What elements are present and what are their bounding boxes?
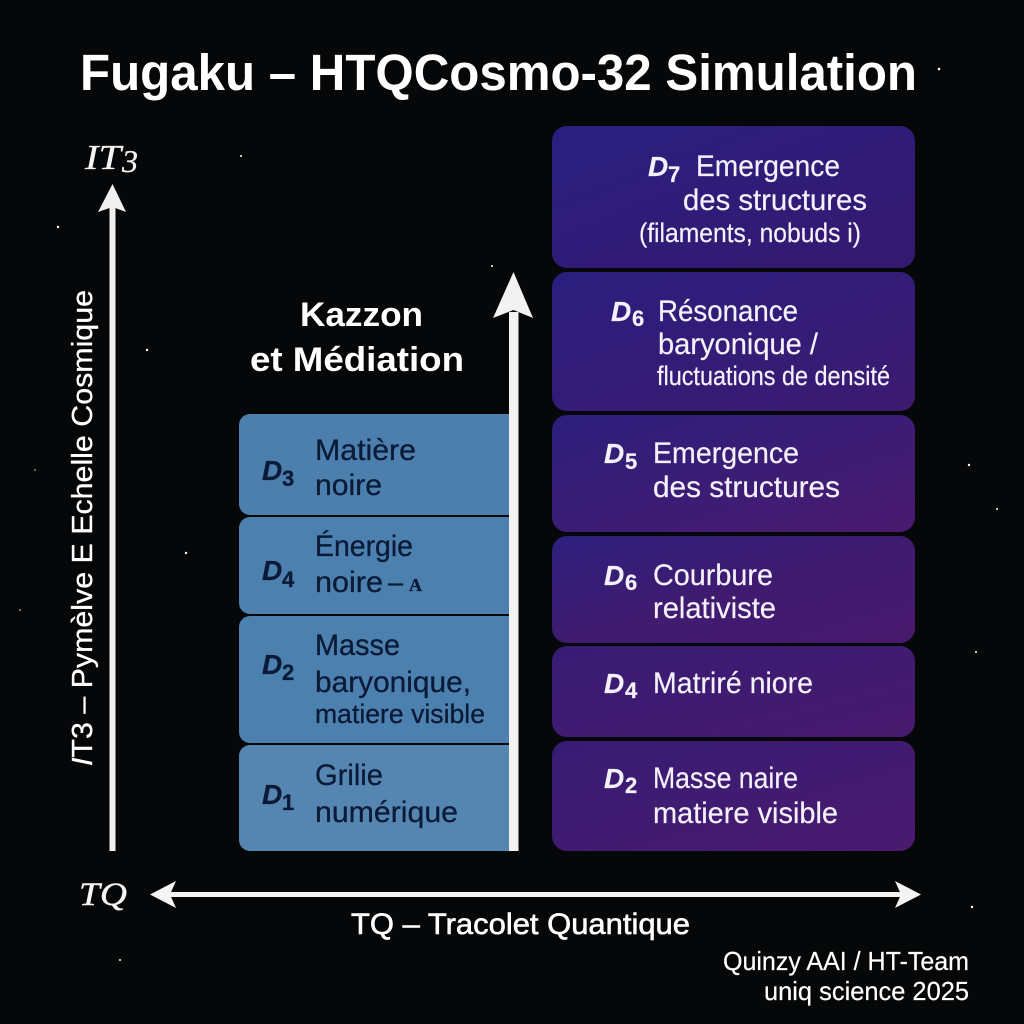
panel: right purple stack [552, 126, 915, 851]
x-axis label: TQ – Tracolet Quantique [351, 908, 690, 941]
layer D4 Énergie noire: Énergie [315, 530, 413, 563]
layer D2 Masse naire [552, 741, 915, 851]
credits: Quinzy AAI / HT-Team [723, 946, 969, 976]
layer D5 Emergence des structures: D [604, 438, 624, 469]
layer D6 Résonance baryonique: fluctuations de densité [657, 361, 890, 391]
y-axis label: IT3 – Pymèlve E Echelle Cosmique [67, 290, 99, 766]
layer D3 Matière noire: Matière [315, 434, 416, 467]
layer D7 Emergence des structures: Emergence [696, 150, 840, 183]
layer D3 Matière noire: 3 [282, 466, 294, 491]
layer D2 Masse naire: Masse naire [653, 762, 798, 795]
layer D3 Matière noire: noire [315, 469, 382, 502]
layer D2 Masse baryonique: matiere visible [315, 699, 485, 729]
layer D1 Grilie numérique: D [262, 779, 282, 810]
layer D6 Résonance baryonique: baryonique / [658, 328, 819, 361]
x-axis arrow [150, 881, 921, 908]
layer D4 Énergie noire: A [409, 575, 422, 595]
layer D1 Grilie numérique: Grilie [315, 759, 383, 792]
layer D2 Masse baryonique [239, 616, 510, 743]
credits [723, 946, 969, 1006]
layer D3 Matière noire [239, 414, 510, 515]
layer D5 Emergence des structures [552, 415, 915, 532]
central arrow [493, 272, 533, 851]
layer D1 Grilie numérique: 1 [282, 790, 294, 815]
layer D2 Masse baryonique: baryonique, [315, 666, 471, 699]
layer D6 Courbure relativiste: D [604, 560, 624, 591]
layer D7 Emergence des structures: des structures [683, 184, 867, 217]
y-axis top label: IT [84, 138, 124, 177]
layer D7 Emergence des structures: D [648, 151, 668, 182]
layer D6 Courbure relativiste [552, 536, 915, 643]
layer D3 Matière noire: D [262, 455, 282, 486]
layer D4 Énergie noire: noire [315, 566, 383, 599]
layer D5 Emergence des structures: Emergence [653, 437, 799, 470]
credits: uniq science 2025 [764, 976, 969, 1006]
layer D7 Emergence des structures: 7 [668, 162, 680, 187]
y-axis top label [84, 138, 138, 179]
layer D7 Emergence des structures: (filaments, nobuds i) [639, 218, 861, 248]
heading: Kazzon et Médiation: Kazzon [300, 296, 423, 334]
layer D1 Grilie numérique [239, 745, 510, 851]
layer D4 Matriré niore: 4 [625, 678, 638, 703]
layer D5 Emergence des structures: 5 [625, 449, 637, 474]
layer D2 Masse naire: D [604, 763, 624, 794]
layer D2 Masse naire: matiere visible [653, 797, 838, 830]
title: Fugaku – HTQCosmo-32 Simulation [80, 44, 917, 101]
layer D2 Masse naire: 2 [625, 773, 637, 798]
layer D6 Courbure relativiste: Courbure [653, 559, 773, 592]
heading: Kazzon et Médiation: et Médiation [250, 341, 464, 379]
layer D4 Énergie noire: 4 [282, 567, 295, 592]
layer D2 Masse baryonique: Masse [315, 629, 400, 662]
layer D4 Matriré niore: D [604, 668, 624, 699]
layer D6 Courbure relativiste: 6 [625, 570, 637, 595]
y-axis arrow [98, 184, 126, 851]
heading: Kazzon et Médiation [250, 296, 464, 379]
panel: left blue stack [239, 414, 510, 851]
layer D6 Résonance baryonique: 6 [632, 306, 644, 331]
layer D4 Énergie noire: D [262, 555, 282, 586]
layer D4 Matriré niore: Matriré niore [653, 667, 813, 700]
layer D4 Matriré niore [552, 646, 915, 737]
layer D6 Résonance baryonique [552, 272, 915, 411]
layer D6 Résonance baryonique: Résonance [658, 295, 798, 328]
layer D5 Emergence des structures: des structures [653, 471, 840, 504]
layer D4 Énergie noire [239, 517, 510, 614]
x-axis origin label: TQ [79, 877, 127, 913]
layer D2 Masse baryonique: D [262, 649, 282, 680]
layer D7 Emergence des structures [552, 126, 915, 268]
layer D1 Grilie numérique: numérique [315, 796, 458, 829]
layer D4 Énergie noire: – [388, 566, 403, 599]
y-axis top label: 3 [121, 143, 138, 179]
layer D6 Résonance baryonique: D [611, 296, 631, 327]
layer D6 Courbure relativiste: relativiste [653, 592, 776, 625]
layer D2 Masse baryonique: 2 [282, 660, 294, 685]
